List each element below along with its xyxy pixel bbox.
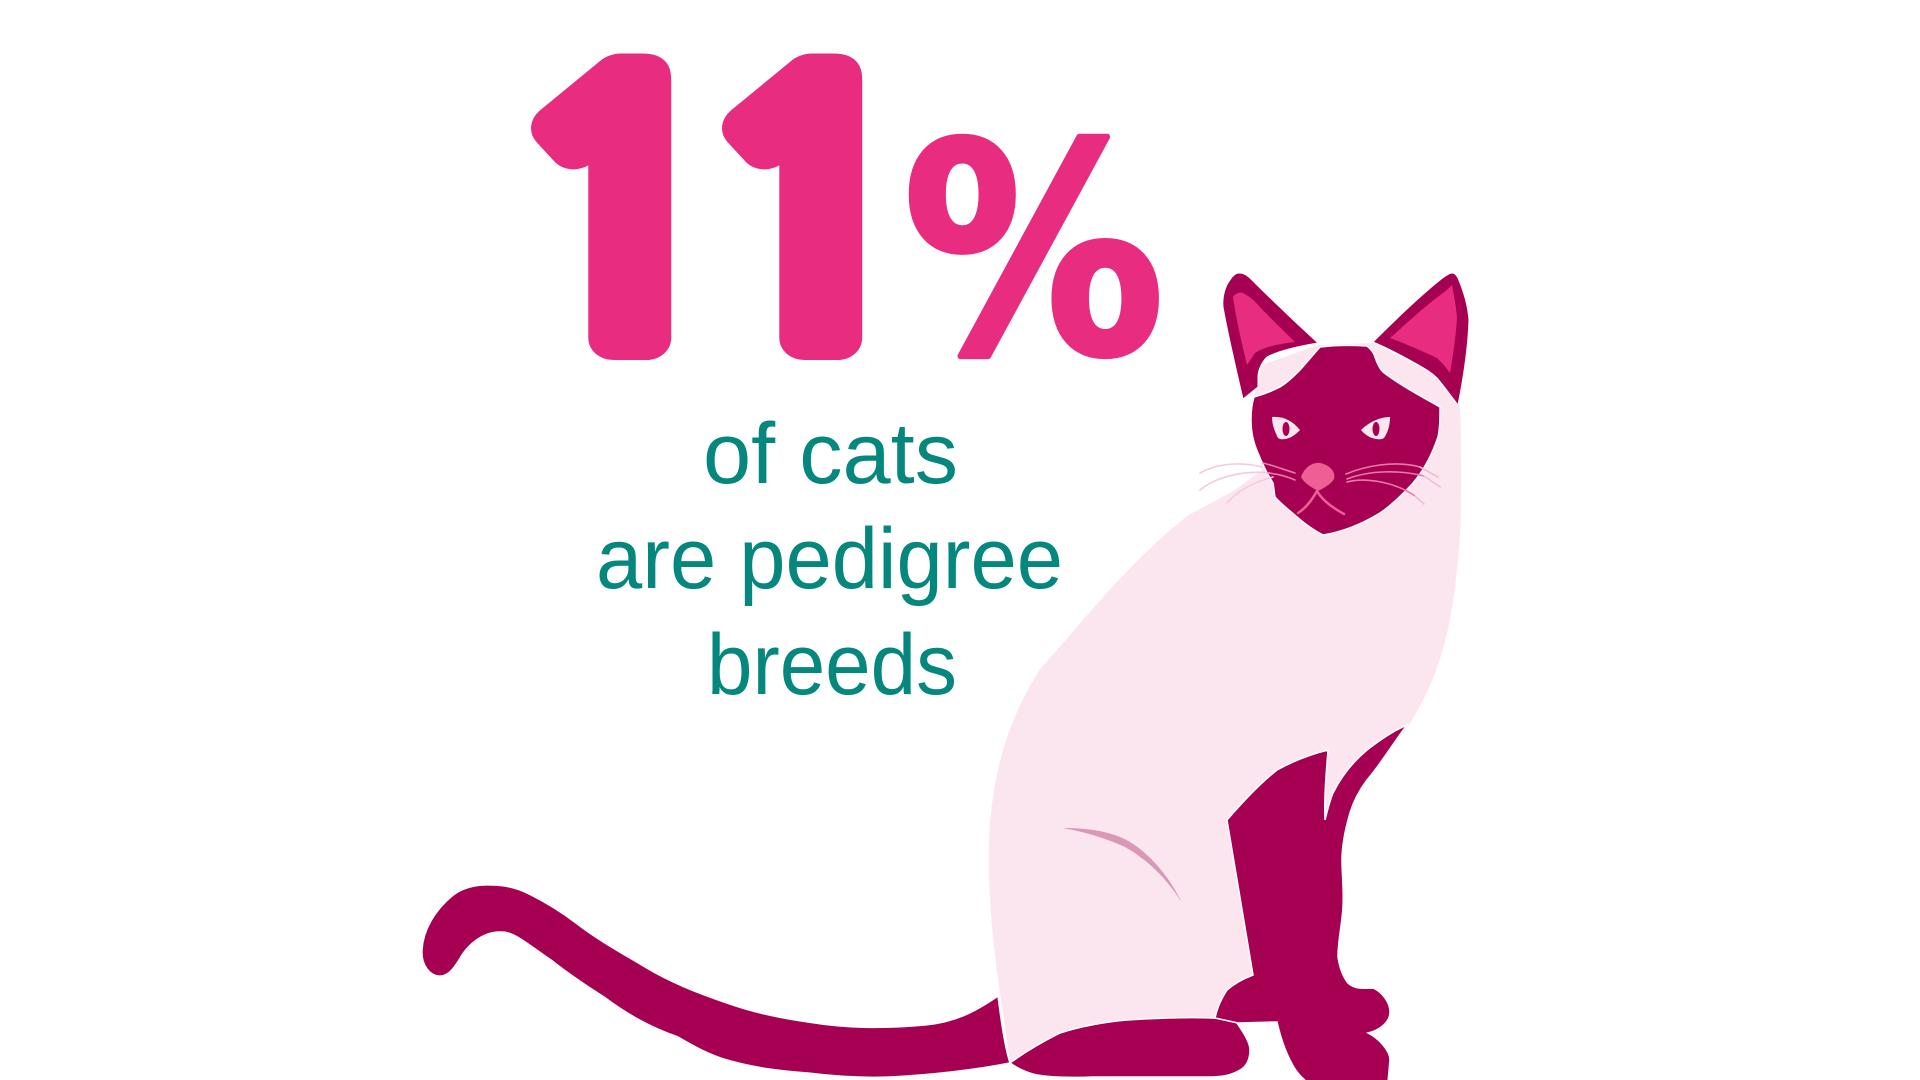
cat face <box>1251 345 1440 535</box>
big number: 11%: 1 <box>500 42 742 395</box>
whiskers <box>1200 463 1440 504</box>
nose <box>1301 463 1334 491</box>
big number: 11%: 1 <box>691 42 933 395</box>
big number: 11%: % <box>903 84 1165 421</box>
cat body <box>989 343 1461 1063</box>
caption: of cats are pedigree breeds: are pedigree <box>596 511 1063 607</box>
right ear <box>1373 273 1469 405</box>
caption: of cats are pedigree breeds: breeds <box>707 617 957 713</box>
caption: of cats are pedigree breeds: of cats <box>703 406 958 502</box>
hind foot <box>1010 1018 1250 1077</box>
left eye <box>1272 417 1300 439</box>
mouth <box>1298 491 1344 514</box>
big number: 11% <box>500 42 1165 421</box>
caption: of cats are pedigree breeds <box>596 406 1063 713</box>
tail <box>422 885 1010 1077</box>
thigh crease <box>1063 828 1182 903</box>
illustration: siamese cat <box>422 273 1469 1080</box>
left ear <box>1223 273 1318 399</box>
front leg and paws <box>1215 725 1407 1080</box>
right eye <box>1361 417 1390 439</box>
